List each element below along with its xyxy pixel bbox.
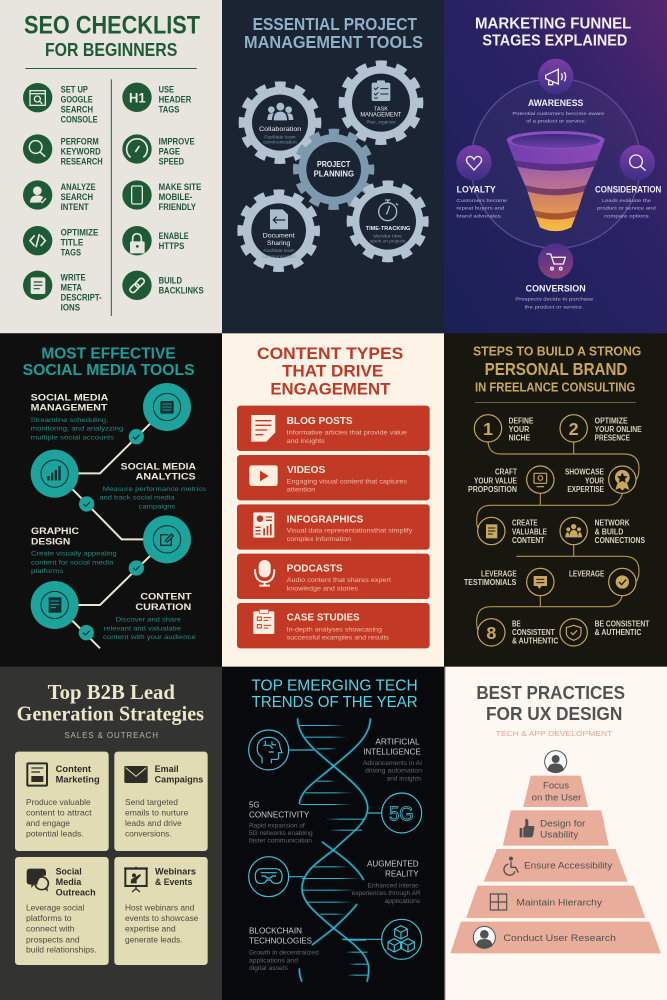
text: graphic design: content for social media bbox=[31, 559, 114, 566]
connector lines bbox=[289, 750, 382, 939]
title: UX design bbox=[476, 682, 625, 724]
step numbers: 1 bbox=[483, 419, 493, 439]
icon circles column right bbox=[122, 83, 152, 300]
text: graphic design: DESIGN bbox=[31, 536, 71, 546]
checklist labels left: CONSOLE bbox=[61, 115, 98, 125]
pyramid tier: maintain hierarchy: Maintain Hierarchy bbox=[516, 898, 603, 908]
text: content curation: CONTENT bbox=[140, 592, 192, 602]
checklist labels left: KEYWORD bbox=[61, 146, 101, 156]
card: webinars and events: expertise and bbox=[125, 924, 176, 934]
stage: awareness: AWARENESS bbox=[528, 98, 583, 108]
gear: time tracking: Monitor time bbox=[373, 234, 402, 239]
stage: conversion: Prospects decide to purchase bbox=[515, 297, 594, 303]
checklist labels right: SPEED bbox=[159, 156, 184, 166]
stage: consideration bbox=[595, 145, 661, 219]
card: social media outreach: connect with bbox=[26, 924, 75, 934]
text: blockchain technologies bbox=[249, 925, 319, 972]
step labels: & BUILD bbox=[595, 527, 624, 536]
card: infographics bbox=[237, 504, 430, 550]
pyramid tier: conduct user research: Conduct User Research bbox=[503, 933, 616, 943]
text: social media management bbox=[31, 392, 124, 441]
node: content curation bbox=[31, 581, 79, 629]
step labels: & AUTHENTIC bbox=[512, 637, 559, 646]
text: artificial intelligence: ARTIFICIAL bbox=[375, 736, 420, 746]
step labels: PROPOSITION bbox=[468, 485, 517, 494]
text: artificial intelligence: and insights bbox=[387, 777, 421, 783]
stage: consideration: Leads evaluate the bbox=[602, 198, 651, 204]
stage: awareness: Potential customers become aware bbox=[512, 111, 605, 117]
card: social media outreach: prospects and bbox=[26, 934, 80, 944]
title: SEO checklist: SEO CHECKLIST bbox=[24, 11, 200, 39]
gear: task management: Plan, organize bbox=[366, 119, 396, 124]
node: 5G: 5G bbox=[389, 803, 414, 826]
pyramid tier: ensure accessibility bbox=[485, 850, 627, 881]
checklist labels right: MAKE SITE bbox=[159, 182, 201, 192]
card: blog posts bbox=[237, 406, 430, 451]
card: blog posts: and insights bbox=[287, 438, 325, 445]
step labels: YOUR bbox=[585, 476, 604, 485]
panel: personal brand steps bbox=[444, 333, 667, 667]
gear: project planning: PROJECT bbox=[317, 160, 350, 169]
step labels: DEFINE bbox=[509, 416, 534, 425]
step numbers bbox=[483, 419, 579, 643]
card: webinars and events: generate leads. bbox=[125, 934, 183, 944]
text: 5G connectivity: 5G networks enabling bbox=[249, 831, 313, 837]
text: artificial intelligence: INTELLIGENCE bbox=[363, 746, 421, 756]
checklist labels right: ENABLE bbox=[159, 231, 189, 241]
checklist labels right: TAGS bbox=[159, 104, 179, 114]
gear: document sharing: Sharing bbox=[267, 240, 291, 247]
step labels: CONTENT bbox=[512, 536, 544, 545]
text: social media analytics: ANALYTICS bbox=[136, 472, 196, 482]
title: content types bbox=[257, 344, 403, 398]
card: podcasts bbox=[237, 554, 430, 599]
title: personal brand: STEPS TO BUILD A STRONG bbox=[473, 344, 641, 359]
card: content marketing: Produce valuable bbox=[26, 797, 91, 807]
text: blockchain technologies: applications and bbox=[249, 958, 298, 964]
checklist labels left: GOOGLE bbox=[61, 94, 93, 104]
checklist labels left: WRITE bbox=[61, 273, 86, 283]
step labels: BE bbox=[512, 619, 521, 628]
title: emerging tech trends bbox=[251, 677, 418, 711]
title: personal brand bbox=[473, 344, 641, 394]
stage: conversion: CONVERSION bbox=[526, 283, 586, 293]
gear: task management bbox=[342, 63, 420, 142]
step labels bbox=[464, 416, 649, 646]
text: 5G connectivity: faster communication bbox=[249, 839, 312, 845]
text: augmented reality: REALITY bbox=[385, 869, 419, 879]
step labels: EXPERTISE bbox=[567, 485, 605, 494]
text: blockchain technologies: TECHNOLOGIES bbox=[249, 935, 312, 945]
card: email campaigns: Send targeted bbox=[125, 797, 178, 807]
card: social media outreach: platforms to bbox=[26, 913, 72, 923]
text: augmented reality: AUGMENTED bbox=[367, 859, 419, 869]
card: webinars and events: Host webinars and bbox=[125, 903, 195, 913]
card: podcasts: knowledge and stories bbox=[287, 585, 359, 592]
icon: H1: H1 bbox=[129, 90, 146, 106]
checklist labels left bbox=[61, 84, 103, 313]
node: artificial intelligence bbox=[249, 730, 289, 770]
connector lines bbox=[55, 407, 167, 648]
checklist labels left: RESEARCH bbox=[61, 156, 103, 166]
step labels: YOUR ONLINE bbox=[595, 425, 642, 434]
card: social media outreach: build relationships. bbox=[26, 945, 97, 955]
card: case studies: CASE STUDIES bbox=[287, 613, 360, 624]
gear: collaboration: Facilitate team bbox=[264, 134, 296, 139]
title: social media tools: SOCIAL MEDIA TOOLS bbox=[23, 362, 195, 379]
gear: document sharing: communication bbox=[262, 254, 296, 259]
pyramid tier: design for usability bbox=[504, 811, 608, 845]
panel: SEO checklist bbox=[0, 0, 223, 333]
text: artificial intelligence: driving automation bbox=[365, 769, 422, 775]
gear: time tracking: spent on projects bbox=[370, 239, 406, 244]
checklist labels left: TITLE bbox=[61, 237, 83, 247]
pyramid tier: focus on the user bbox=[524, 776, 587, 806]
card: email campaigns: emails to nurture bbox=[125, 807, 189, 817]
gear: document sharing: Facilitate team bbox=[263, 248, 295, 253]
stage: loyalty bbox=[456, 145, 508, 219]
text: social media analytics: campaigns bbox=[139, 503, 176, 510]
icon: lock bbox=[130, 234, 145, 253]
step labels: LEVERAGE bbox=[481, 569, 517, 578]
pyramid tier: focus on the user: on the User bbox=[532, 792, 581, 802]
card: videos bbox=[237, 455, 430, 500]
checklist labels right: BACKLINKS bbox=[159, 285, 204, 295]
panel: marketing funnel bbox=[444, 0, 667, 333]
card: case studies: In-depth analyses showcasing bbox=[287, 626, 382, 633]
stage: awareness bbox=[512, 59, 605, 125]
checklist labels right: BUILD bbox=[159, 275, 182, 285]
text: blockchain technologies: digital assets bbox=[249, 966, 288, 972]
card: videos: Engaging visual content that captures bbox=[287, 478, 408, 485]
title: personal brand: PERSONAL BRAND bbox=[485, 359, 627, 379]
step numbers: 8 bbox=[486, 623, 496, 643]
checklist labels right bbox=[159, 84, 204, 295]
checklist labels left: META bbox=[61, 283, 82, 293]
step numbers: 2 bbox=[569, 419, 579, 439]
checklist labels left: SEARCH bbox=[61, 192, 93, 202]
gear: time tracking bbox=[350, 183, 426, 259]
text: blockchain technologies: Growth in decentralized bbox=[249, 950, 319, 956]
step labels: NETWORK bbox=[595, 519, 630, 528]
card: blog posts: Informative articles that provide value bbox=[287, 430, 407, 437]
title: B2B lead generation: Top B2B Lead bbox=[48, 680, 175, 704]
card: email campaigns: Email bbox=[155, 764, 179, 774]
node: blockchain bbox=[382, 919, 422, 959]
title: B2B lead generation bbox=[17, 680, 204, 725]
stage: loyalty: repeat buyers and bbox=[456, 206, 505, 212]
title: marketing funnel: MARKETING FUNNEL bbox=[475, 16, 631, 33]
title: UX design: BEST PRACTICES bbox=[476, 682, 625, 703]
title: marketing funnel: STAGES EXPLAINED bbox=[482, 32, 627, 49]
text: 5G connectivity: CONNECTIVITY bbox=[249, 809, 310, 819]
connecting path bbox=[477, 442, 639, 633]
card: podcasts: PODCASTS bbox=[287, 564, 343, 575]
panel: B2B lead generation bbox=[0, 667, 223, 1000]
text: social media management: MANAGEMENT bbox=[31, 403, 108, 413]
checklist labels right: USE bbox=[159, 84, 174, 94]
card: social media outreach: Leverage social bbox=[26, 903, 84, 913]
gear: task management: MANAGEMENT bbox=[360, 112, 402, 118]
checklist labels left: SEARCH bbox=[61, 104, 93, 114]
text: social media management: SOCIAL MEDIA bbox=[31, 392, 109, 402]
pyramid tier: design for usability: Usability bbox=[540, 830, 579, 840]
step labels: YOUR bbox=[509, 425, 530, 434]
card: social media outreach: Media bbox=[56, 877, 82, 887]
text: content curation: content with your audience bbox=[103, 634, 196, 641]
text: social media management: Streamline scheduling, bbox=[31, 417, 109, 424]
stage ring bbox=[471, 78, 641, 248]
checklist labels left: OPTIMIZE bbox=[61, 227, 98, 237]
stage: loyalty: LOYALTY bbox=[457, 185, 496, 195]
card: webinars and events: events to showcase bbox=[125, 913, 199, 923]
pyramid tier: focus on the user: Focus bbox=[543, 781, 570, 791]
checklist labels right: MOBILE- bbox=[159, 192, 192, 202]
title: SEO checklist: FOR BEGINNERS bbox=[45, 39, 177, 60]
text: social media analytics: and track social media bbox=[99, 495, 175, 502]
text: augmented reality: applications bbox=[384, 899, 420, 905]
card: infographics: complex information bbox=[287, 536, 352, 543]
text: 5G connectivity bbox=[249, 799, 313, 845]
step labels: CRAFT bbox=[495, 468, 517, 477]
stage: loyalty: Customers become bbox=[456, 198, 508, 204]
checklist labels right: HEADER bbox=[159, 94, 192, 104]
step labels: VALUABLE bbox=[512, 527, 548, 536]
pyramid tier: ensure accessibility: Ensure Accessibility bbox=[524, 860, 613, 870]
icon: gauge bbox=[127, 139, 147, 157]
panel: social media tools bbox=[0, 333, 223, 667]
card: videos: VIDEOS bbox=[287, 465, 326, 476]
checklist labels left: IONS bbox=[61, 303, 80, 313]
title: personal brand: IN FREELANCE CONSULTING bbox=[475, 380, 635, 394]
title: B2B lead generation: Generation Strategies bbox=[17, 701, 204, 725]
title: content types: ENGAGEMENT bbox=[270, 379, 390, 398]
icon circles column left bbox=[23, 83, 52, 300]
card: content marketing: potential leads. bbox=[26, 829, 84, 839]
text: content curation bbox=[103, 592, 196, 641]
step icons bbox=[486, 470, 630, 640]
step labels: CREATE bbox=[512, 519, 538, 528]
gear: project planning bbox=[296, 132, 371, 207]
icon: top user bbox=[545, 751, 567, 773]
icon: phone bbox=[132, 186, 142, 204]
title: project management tools: MANAGEMENT TOOLS bbox=[244, 32, 423, 52]
node: social media management bbox=[143, 383, 191, 431]
text: content curation: relevant and valualabe bbox=[104, 625, 181, 632]
card: videos: attention bbox=[287, 487, 316, 494]
card: case studies bbox=[237, 603, 430, 648]
text: artificial intelligence: Advancements in AI bbox=[363, 761, 422, 767]
checklist labels left: PERFORM bbox=[61, 136, 99, 146]
step node circles bbox=[474, 415, 636, 646]
card: webinars and events: Webinars bbox=[155, 866, 196, 876]
panel: UX design best practices bbox=[444, 667, 667, 1000]
stage: consideration: compare options bbox=[604, 213, 649, 219]
step labels: NICHE bbox=[509, 434, 531, 443]
card: webinars and events: & Events bbox=[155, 877, 192, 887]
icon: magnifier bbox=[29, 141, 45, 157]
text: graphic design: platforms bbox=[31, 568, 64, 575]
icon: document bbox=[31, 277, 45, 294]
stage: conversion bbox=[515, 243, 594, 310]
stage: loyalty: brand advocates. bbox=[456, 213, 502, 219]
node: augmented reality bbox=[249, 857, 289, 897]
pyramid tier: design for usability: Design for bbox=[540, 818, 585, 828]
panel: content types bbox=[222, 333, 445, 667]
card: email campaigns: leads and drive bbox=[125, 818, 182, 828]
card: webinars and events bbox=[114, 857, 208, 965]
pyramid tier: conduct user research bbox=[451, 922, 660, 953]
icon: browser search bbox=[30, 91, 45, 105]
checklist labels right: HTTPS bbox=[159, 241, 184, 251]
card: email campaigns: Campaigns bbox=[155, 775, 203, 785]
DNA helix rungs bbox=[299, 725, 369, 976]
title: project management tools bbox=[244, 14, 423, 52]
step labels: BE CONSISTENT bbox=[595, 619, 649, 628]
pyramid tier: maintain hierarchy bbox=[467, 886, 644, 917]
title: UX design: FOR UX DESIGN bbox=[486, 703, 622, 724]
checklist labels left: DESCRIPT- bbox=[61, 293, 102, 303]
checklist labels right: PAGE bbox=[159, 146, 180, 156]
text: augmented reality bbox=[352, 859, 421, 905]
node: graphic design bbox=[143, 515, 191, 563]
text: content curation: CURATION bbox=[135, 602, 192, 612]
card: content marketing bbox=[15, 752, 109, 851]
checklist labels left: ANALYZE bbox=[61, 182, 96, 192]
funnel bbox=[507, 131, 605, 231]
text: 5G connectivity: 5G bbox=[249, 799, 260, 809]
step labels: & AUTHENTIC bbox=[595, 628, 642, 637]
text: blockchain technologies: BLOCKCHAIN bbox=[249, 925, 302, 935]
text: graphic design bbox=[31, 526, 117, 575]
gear: project planning: PLANNING bbox=[314, 170, 354, 179]
stage: awareness: of a product or service. bbox=[526, 119, 586, 125]
card: content marketing: and engage bbox=[26, 818, 70, 828]
text: augmented reality: Enhanced interac- bbox=[368, 883, 421, 889]
gear: time tracking: TIME-TRACKING bbox=[366, 226, 411, 232]
card: content marketing: Content bbox=[56, 764, 91, 774]
checklist labels left: INTENT bbox=[61, 202, 89, 212]
text: social media management: multiple social accounts bbox=[31, 434, 115, 441]
title: marketing funnel bbox=[475, 16, 631, 49]
text: content curation: Discover and share bbox=[116, 617, 181, 624]
card: social media outreach: Outreach bbox=[56, 888, 96, 898]
card: content marketing: Marketing bbox=[56, 775, 100, 785]
DNA helix strands bbox=[298, 718, 370, 982]
step labels: PRESENCE bbox=[595, 434, 631, 443]
text: graphic design: GRAPHIC bbox=[31, 526, 79, 536]
title: social media tools: MOST EFFECTIVE bbox=[41, 346, 176, 363]
check badges bbox=[79, 429, 144, 640]
step labels: YOUR VALUE bbox=[474, 476, 518, 485]
card: case studies: successful examples and results bbox=[287, 635, 390, 642]
card: email campaigns bbox=[114, 752, 208, 851]
title: project management tools: ESSENTIAL PROJECT bbox=[253, 14, 417, 34]
text: graphic design: Create visually appealing bbox=[31, 551, 117, 558]
card: podcasts: Audio content that shares expert bbox=[287, 577, 391, 584]
icon: link bbox=[129, 277, 145, 294]
text: 5G connectivity: Rapid expansion of bbox=[249, 823, 305, 829]
title: emerging tech trends: TRENDS OF THE YEAR bbox=[252, 694, 418, 711]
step labels: TESTIMONIALS bbox=[464, 578, 517, 587]
title: social media tools bbox=[23, 346, 195, 379]
checklist labels right: FRIENDLY bbox=[159, 202, 197, 212]
gear: collaboration: Collaboration bbox=[259, 126, 302, 133]
title: emerging tech trends: TOP EMERGING TECH bbox=[251, 677, 418, 694]
step labels: OPTIMIZE bbox=[595, 416, 628, 425]
text: augmented reality: experiences through AR bbox=[352, 891, 421, 897]
subtitle: TECH & APP DEVELOPMENT bbox=[496, 729, 613, 738]
text: artificial intelligence bbox=[363, 736, 422, 783]
node: 5G bbox=[382, 793, 422, 833]
card: content marketing: content to attract bbox=[26, 807, 92, 817]
gear: document sharing bbox=[240, 192, 317, 269]
text: social media management: monitoring, and analyzzing bbox=[31, 426, 124, 433]
step labels: CONNECTIONS bbox=[595, 536, 646, 545]
gear: document sharing: Document bbox=[263, 233, 295, 240]
text: social media analytics: SOCIAL MEDIA bbox=[121, 461, 196, 471]
icon: person with check bbox=[30, 186, 46, 203]
checklist labels left: TAGS bbox=[61, 247, 81, 257]
title: content types: CONTENT TYPES bbox=[257, 344, 403, 363]
text: social media analytics bbox=[99, 461, 207, 510]
card: infographics: Visual data representationsthat simplify bbox=[287, 528, 413, 535]
panel: project management tools bbox=[222, 0, 445, 333]
step labels: SHOWCASE bbox=[565, 468, 605, 477]
card: email campaigns: conversions. bbox=[125, 829, 172, 839]
title: content types: THAT DRIVE bbox=[282, 362, 383, 381]
node: analytics bbox=[31, 450, 79, 498]
step labels: CONSISTENT bbox=[512, 628, 555, 637]
stage: consideration: product or service and bbox=[597, 206, 656, 212]
title: SEO checklist bbox=[24, 11, 200, 60]
icon: code bbox=[30, 234, 45, 247]
subtitle: SALES & OUTREACH bbox=[64, 731, 158, 740]
checklist labels right: IMPROVE bbox=[159, 136, 195, 146]
card: infographics: INFOGRAPHICS bbox=[287, 514, 364, 525]
panel: emerging tech trends bbox=[222, 667, 445, 1000]
gear: collaboration: communication bbox=[263, 140, 297, 145]
checklist labels left: SET UP bbox=[61, 84, 88, 94]
card: social media outreach: Social bbox=[56, 866, 82, 876]
step labels: LEVERAGE bbox=[569, 569, 605, 578]
gear: collaboration bbox=[242, 84, 318, 161]
card: social media outreach bbox=[15, 857, 109, 965]
card: blog posts: BLOG POSTS bbox=[287, 416, 353, 427]
gear: task management: TASK bbox=[374, 106, 388, 112]
stage: conversion: the product or service. bbox=[525, 304, 584, 310]
text: social media analytics: Measure performance metrics bbox=[103, 486, 207, 493]
